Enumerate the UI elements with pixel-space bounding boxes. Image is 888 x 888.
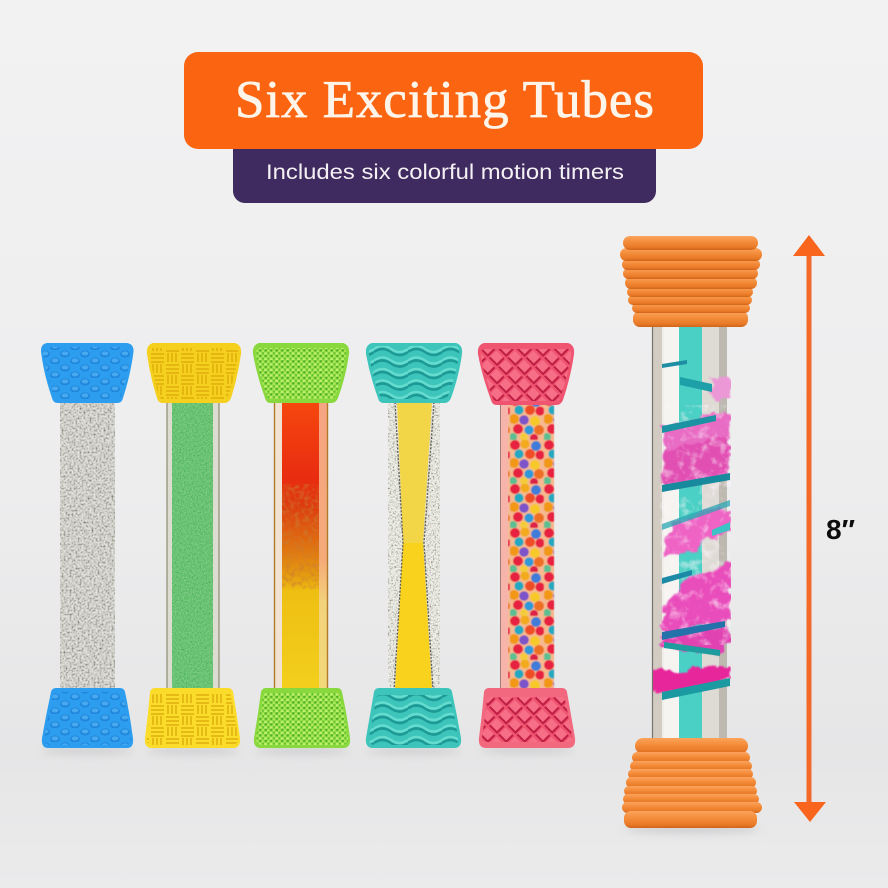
beads tube body — [500, 402, 554, 690]
orange heading: Six Exciting Tubes — [235, 71, 654, 129]
floor shadows — [41, 746, 760, 834]
pink top cap — [478, 343, 574, 405]
tube 1: blue silver glitter — [41, 343, 134, 748]
height label: 8″ — [826, 514, 855, 545]
pink bottom cap — [479, 688, 575, 748]
yellow top cap — [147, 343, 241, 403]
teal central column — [679, 326, 702, 740]
subtitle bar: Includes six colorful motion timers — [266, 161, 624, 184]
orange bottom cap — [622, 738, 762, 828]
green glitter tube body — [167, 402, 219, 690]
tube 3: green red to yellow liquid — [253, 343, 350, 748]
blue top cap — [41, 343, 134, 403]
title banner — [184, 52, 703, 203]
yellow bottom cap — [145, 688, 240, 748]
pink swirl liquid — [652, 376, 731, 692]
tube 4: teal hourglass sand — [366, 343, 462, 748]
blue bottom cap — [42, 688, 133, 748]
orange top cap — [620, 236, 762, 327]
tube 2: yellow green glitter — [145, 343, 241, 748]
subtitle bar — [233, 140, 656, 203]
teal helix stripes — [662, 360, 730, 700]
orange heading — [184, 52, 703, 149]
tube 6: large orange swirl timer — [620, 236, 762, 828]
hourglass tube body — [388, 402, 440, 690]
glitter tube body — [60, 402, 115, 690]
swirl tube body — [652, 326, 731, 740]
tube 5: pink colored beads — [478, 343, 575, 748]
height arrow — [793, 235, 826, 822]
green top cap — [253, 343, 349, 403]
green bottom cap — [254, 688, 350, 748]
teal top cap — [366, 343, 462, 403]
teal bottom cap — [366, 688, 461, 748]
liquid tube body — [274, 402, 328, 690]
white mottling — [660, 405, 731, 645]
